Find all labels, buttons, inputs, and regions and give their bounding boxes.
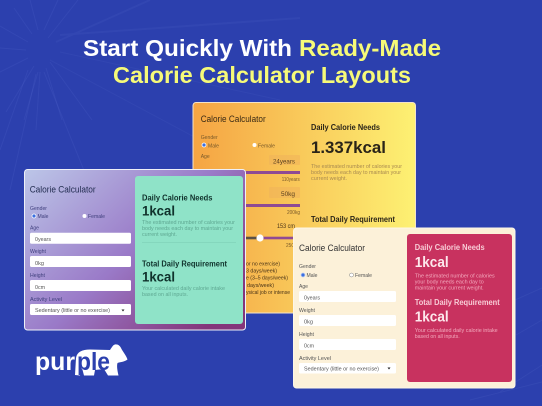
- cream form fields: Weight: [299, 308, 315, 314]
- cream form fields: [299, 264, 396, 374]
- orange results: current weight.: [311, 176, 347, 182]
- cream form fields: Sedentary (little or no exercise): [304, 366, 379, 372]
- orange results: Daily Calorie Needs: [311, 123, 381, 132]
- orange form fields: Gender: [201, 135, 218, 141]
- orange activity options: [246, 262, 290, 296]
- orange form fields: [200, 135, 300, 249]
- orange calculator heading: Calorie Calculator: [201, 114, 266, 124]
- orange activity options: days/week): [247, 283, 274, 289]
- logo: purple bear: [35, 344, 128, 376]
- cream form fields: Female: [355, 273, 372, 279]
- teal results panel: current weight.: [142, 232, 177, 238]
- crimson results panel: Your calculated daily calorie intake: [415, 328, 498, 334]
- crimson results panel: 1kcal: [415, 255, 449, 271]
- teal results panel: Your calculated daily calorie intake: [142, 286, 225, 292]
- logo: purple bear: pur: [35, 348, 75, 376]
- crimson results panel: Daily Calorie Needs: [415, 243, 485, 252]
- crimson results panel: Total Daily Requirement: [415, 298, 500, 307]
- orange form fields: 50kg: [281, 192, 295, 198]
- orange form fields: Male: [208, 144, 219, 150]
- orange form fields: 250: [286, 243, 294, 249]
- orange form fields: 200kg: [287, 210, 300, 216]
- logo: purple bear: ple: [77, 348, 110, 376]
- title: [83, 35, 441, 88]
- title: Ready-Made: [299, 35, 441, 61]
- teal results panel: 1kcal: [142, 268, 175, 284]
- orange results: [311, 123, 402, 224]
- crimson results panel: The estimated number of calories: [415, 274, 495, 280]
- purple calculator heading: Calorie Calculator: [30, 185, 96, 195]
- cream form fields: Height: [299, 332, 314, 338]
- orange form fields: 110years: [282, 177, 300, 183]
- cream calculator heading: Calorie Calculator: [299, 243, 365, 253]
- purple form fields: Activity Level: [30, 297, 62, 303]
- orange activity options: ysical job or intense: [246, 290, 290, 296]
- cream form fields: Activity Level: [299, 356, 331, 362]
- cream form fields: Male: [306, 273, 318, 279]
- orange results: 1.337kcal: [311, 138, 386, 157]
- teal results panel: based on all inputs.: [142, 292, 188, 298]
- panel: cream calculator: [294, 228, 515, 388]
- cream form fields: Age: [299, 284, 308, 290]
- teal results panel: Total Daily Requirement: [142, 260, 227, 269]
- purple form fields: Height: [30, 273, 45, 279]
- teal results panel: The estimated number of calories your: [142, 220, 235, 226]
- crimson results panel: [407, 234, 512, 382]
- orange results: The estimated number of calories your: [311, 164, 402, 170]
- icon: bear: [75, 344, 128, 376]
- cream form fields: 0cm: [304, 344, 314, 350]
- purple form fields: Age: [30, 226, 39, 232]
- orange form fields: 153 cm: [277, 224, 295, 230]
- title: Calorie Calculator Layouts: [113, 62, 411, 88]
- cream form fields: 0kg: [304, 320, 313, 326]
- teal results panel: [135, 176, 243, 324]
- crimson results panel: your body needs each day to: [415, 280, 484, 286]
- purple form fields: Sedentary (little or no exercise): [35, 308, 110, 314]
- purple form fields: Weight: [30, 249, 46, 255]
- crimson results panel: 1kcal: [415, 310, 449, 326]
- title: Start Quickly With: [83, 35, 292, 61]
- purple form fields: 0years: [35, 237, 51, 243]
- purple form fields: Male: [38, 214, 48, 220]
- orange activity options: 3 days/week): [246, 268, 277, 274]
- orange results: body needs each day to maintain your: [311, 170, 401, 176]
- cream form fields: Gender: [299, 264, 316, 270]
- orange activity options: or no exercise): [246, 262, 280, 268]
- purple form fields: 0cm: [35, 285, 45, 291]
- teal results panel: Daily Calorie Needs: [142, 194, 213, 203]
- orange form fields: Female: [258, 144, 275, 150]
- teal results panel: body needs each day to maintain your: [142, 226, 233, 232]
- purple form fields: [30, 206, 131, 315]
- purple form fields: Gender: [30, 206, 47, 212]
- teal results panel: 1kcal: [142, 203, 175, 219]
- crimson results panel: based on all inputs.: [415, 334, 460, 340]
- panel: orange calculator: [193, 102, 416, 313]
- orange form fields: Age: [201, 154, 210, 160]
- orange results: Total Daily Requirement: [311, 215, 395, 224]
- purple form fields: 0kg: [35, 261, 44, 267]
- orange activity options: e (3–5 days/week): [246, 276, 288, 282]
- panel: purple calculator: [24, 170, 246, 330]
- crimson results panel: maintain your current weight.: [415, 286, 484, 292]
- purple form fields: Female: [88, 214, 105, 220]
- cream form fields: 0years: [304, 296, 320, 302]
- orange form fields: 24years: [273, 160, 295, 166]
